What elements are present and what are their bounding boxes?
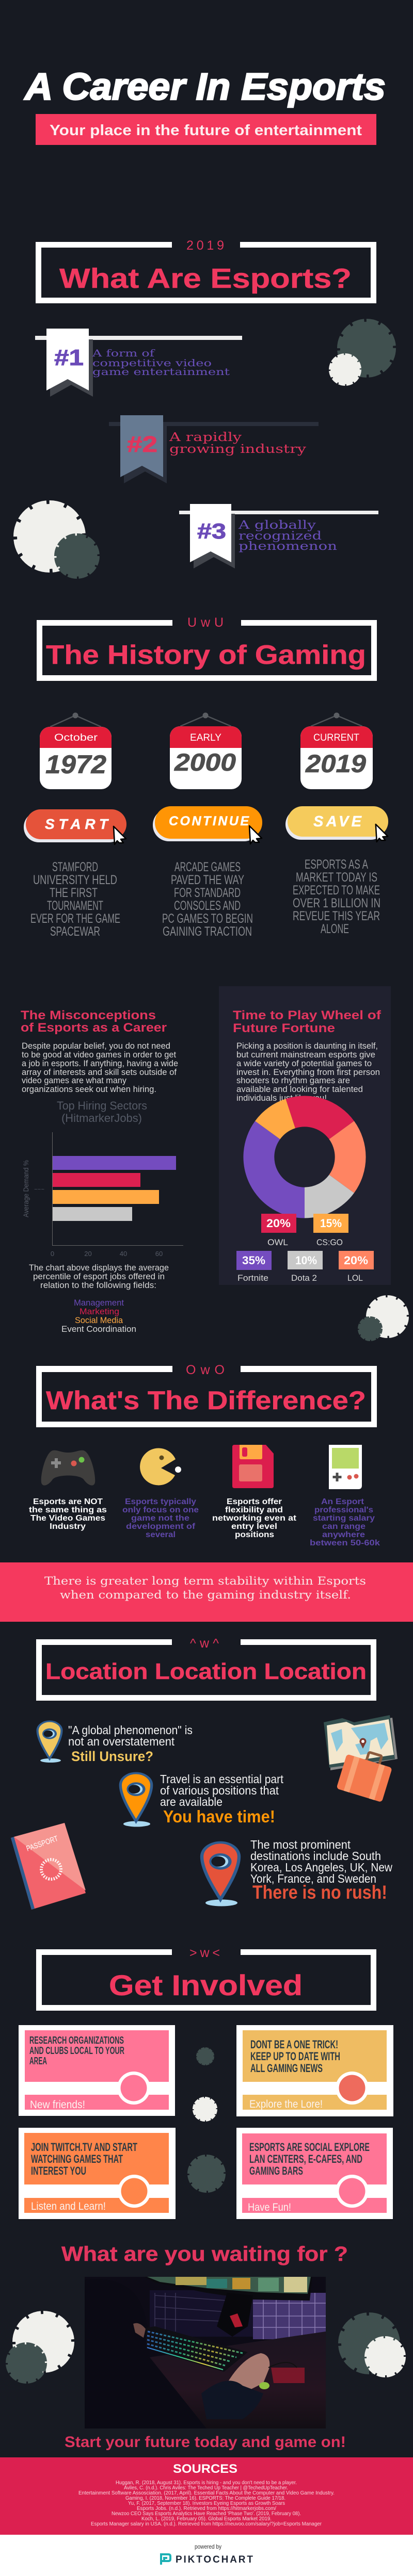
donut legend: Dota 2 bbox=[291, 1273, 317, 1283]
difference text 2: several bbox=[146, 1530, 176, 1539]
timeline text 1972: UNIVERSITY HELD bbox=[33, 873, 117, 887]
card: research organizations: AND CLUBS LOCAL TO YOUR bbox=[29, 2045, 124, 2057]
timeline text 1972: STAMFORD bbox=[52, 860, 98, 874]
difference text 3: Esports offer bbox=[227, 1497, 282, 1506]
difference text 3: positions bbox=[235, 1530, 274, 1539]
card: research organizations: RESEARCH ORGANIZATIONS bbox=[29, 2035, 124, 2046]
photo: gamer at keyboard bbox=[85, 2277, 326, 2428]
point #1: game entertainment bbox=[92, 366, 230, 378]
difference text 4: professional's bbox=[314, 1506, 373, 1514]
calendar 2019: 2019 bbox=[305, 751, 366, 778]
section heading: Location bbox=[36, 1636, 376, 1701]
gears top right bbox=[330, 320, 394, 385]
title: A Career In Esports bbox=[24, 66, 386, 108]
button: continue bbox=[153, 806, 262, 844]
calendar 2000 bbox=[170, 713, 242, 789]
difference text 4: An Esport bbox=[321, 1497, 364, 1506]
card: dont be a one trick: Explore the Lore! bbox=[249, 2098, 323, 2110]
section heading: What Are Esports bbox=[36, 238, 376, 303]
timeline text 2000: PAVED THE WAY bbox=[171, 873, 244, 887]
difference text 4: anywhere bbox=[322, 1530, 365, 1539]
timeline text 1972: SPACEWAR bbox=[50, 924, 100, 939]
point #1: A form of bbox=[92, 348, 156, 359]
location point 3: The most prominent bbox=[250, 1838, 351, 1851]
sources panel: Aviles, C. (n.d.). Chris Aviles: The Teched Up Teacher | @TechedUpTeacher. bbox=[124, 2485, 288, 2491]
icon: pacman bbox=[140, 1448, 181, 1485]
panel: misconceptions: percentile of esport jobs offered in bbox=[33, 1271, 165, 1281]
section heading: Location: ^w^ bbox=[190, 1636, 219, 1651]
callout band bbox=[0, 1562, 413, 1622]
point #3: A globally bbox=[238, 519, 316, 532]
donut legend: OWL bbox=[267, 1237, 288, 1247]
timeline text 2000 bbox=[162, 860, 253, 939]
section heading: History of Gaming: UwU bbox=[187, 615, 224, 630]
icon: passport bbox=[11, 1823, 86, 1910]
sources panel: Huggan, R. (2018, August 31). Esports is hiring - and you don't need to be a player. bbox=[116, 2480, 297, 2486]
gears between cards bbox=[188, 2048, 225, 2192]
sources panel: Esports Jobs. (n.d.). Retrieved from https://hitmarkerjobs.com/ bbox=[137, 2505, 276, 2512]
donut legend bbox=[236, 1214, 374, 1283]
panel: misconceptions: array of interests and skill sets outside of bbox=[22, 1067, 177, 1077]
button: continue: CONTINUE bbox=[169, 814, 249, 828]
donut legend: 10% bbox=[295, 1254, 317, 1267]
button: save: SAVE bbox=[313, 813, 362, 830]
sources panel: Koch, L. (2019, February 05). Global Esports Market 2019. bbox=[141, 2516, 272, 2522]
gears left bbox=[15, 502, 98, 577]
section heading: History of Gaming: The History of Gaming bbox=[46, 640, 366, 670]
closing heading: What are you waiting for ? bbox=[61, 2243, 348, 2265]
panel: wheel of future fortune: shooters to rhythm games are bbox=[236, 1075, 350, 1085]
chart legend: Event Coordination bbox=[61, 1324, 136, 1334]
card: dont be a one trick: DONT BE A ONE TRICK! bbox=[250, 2038, 338, 2051]
card: esports are social bbox=[236, 2128, 393, 2219]
section heading: What's The Difference: What's The Difference? bbox=[46, 1386, 366, 1415]
bar chart: top hiring sectors: Top Hiring Sectors bbox=[57, 1099, 147, 1112]
difference text 4: can range bbox=[322, 1522, 366, 1531]
point #3: phenomenon bbox=[239, 540, 337, 553]
timeline text 1972 bbox=[30, 860, 120, 939]
section heading: Get Involved bbox=[36, 1946, 376, 2011]
timeline text 2019: ALONE bbox=[321, 922, 349, 936]
timeline text 2019 bbox=[293, 857, 380, 936]
bar chart: top hiring sectors: 0 bbox=[51, 1250, 54, 1258]
section heading: Location: Location Location Location bbox=[45, 1659, 367, 1684]
panel: wheel of future fortune bbox=[219, 986, 391, 1285]
icon: game controller bbox=[41, 1450, 95, 1486]
difference text 3: entry level bbox=[231, 1522, 277, 1531]
icon: handheld console bbox=[329, 1445, 362, 1489]
bar chart: top hiring sectors: 60 bbox=[155, 1250, 163, 1258]
chart legend bbox=[61, 1298, 136, 1334]
bar chart: top hiring sectors: (HitmarkerJobs) bbox=[61, 1112, 142, 1124]
timeline text 2000: PC GAMES TO BEGIN bbox=[162, 911, 253, 926]
panel: wheel of future fortune: invest in. Everything from first person bbox=[236, 1067, 380, 1077]
footer: powered by piktochart bbox=[0, 2535, 413, 2576]
card: research organizations: AREA bbox=[29, 2056, 47, 2067]
card: join twitch: Listen and Learn! bbox=[31, 2200, 106, 2212]
donut legend: 35% bbox=[242, 1254, 265, 1267]
calendar 2019 bbox=[300, 713, 373, 789]
panel: misconceptions bbox=[21, 1008, 183, 1334]
location point 2: You have time! bbox=[163, 1807, 275, 1826]
location point 1: Still Unsure? bbox=[71, 1749, 153, 1764]
timeline text 2019: OVER 1 BILLION IN bbox=[293, 896, 380, 910]
location point 2 bbox=[120, 1772, 284, 1827]
point #2: #2 bbox=[127, 432, 157, 457]
difference text 1 bbox=[29, 1497, 107, 1531]
panel: wheel of future fortune: a wide variety of potential games to bbox=[236, 1058, 372, 1068]
sources panel: Newzoo CEO Says Esports Analytics Have Reached 'Phase Two'. (2019, February 08). bbox=[112, 2510, 301, 2517]
point #2: growing industry bbox=[169, 443, 306, 456]
difference text 4: between 50-60k bbox=[310, 1539, 380, 1547]
icon: floppy disk bbox=[232, 1445, 274, 1488]
icon: suitcase bbox=[336, 1746, 395, 1802]
point #3: recognized bbox=[239, 530, 322, 543]
panel: misconceptions: to be good at video games in order to get bbox=[22, 1050, 176, 1059]
difference text 2: only focus on one bbox=[122, 1506, 199, 1514]
location point 1 bbox=[38, 1721, 193, 1764]
point #3: #3 bbox=[197, 519, 226, 543]
location point 2: Travel is an essential part bbox=[160, 1772, 284, 1786]
card: join twitch: INTEREST YOU bbox=[31, 2164, 86, 2177]
timeline text 2019: MARKET TODAY IS bbox=[296, 870, 377, 885]
donut legend: Fortnite bbox=[237, 1273, 268, 1283]
timeline text 1972: EVER FOR THE GAME bbox=[30, 911, 120, 926]
donut legend: 15% bbox=[320, 1217, 342, 1230]
callout band: when compared to the gaming industry itself. bbox=[60, 1589, 351, 1601]
footer: powered by piktochart: powered by bbox=[195, 2543, 221, 2550]
location point 3 bbox=[202, 1838, 392, 1906]
panel: wheel of future fortune: available and looking for talented bbox=[236, 1084, 363, 1094]
bar chart: top hiring sectors: 20 bbox=[84, 1250, 92, 1258]
timeline text 2019: ESPORTS AS A bbox=[305, 857, 368, 872]
gears right of photo bbox=[340, 2314, 405, 2376]
location point 2: are available bbox=[160, 1795, 223, 1808]
calendar 1972 bbox=[40, 713, 112, 789]
location point 1: "A global phenomenon" is bbox=[68, 1723, 193, 1737]
panel: misconceptions: The Misconceptions bbox=[21, 1008, 156, 1022]
panel: misconceptions: Despite popular belief, you do not need bbox=[22, 1041, 170, 1051]
point #1: #1 bbox=[54, 345, 84, 370]
card: dont be a one trick bbox=[236, 2025, 393, 2116]
point #2: A rapidly bbox=[169, 431, 242, 444]
panel: wheel of future fortune: Time to Play Wheel of bbox=[233, 1008, 382, 1022]
difference text 3: networking even at bbox=[212, 1514, 297, 1523]
panel: misconceptions: video games are what many bbox=[22, 1075, 126, 1085]
card: join twitch: JOIN TWITCH.TV AND START bbox=[31, 2141, 137, 2154]
location point 1: not an overstatement bbox=[68, 1735, 175, 1748]
gears bottom right of panel bbox=[358, 1296, 408, 1341]
difference text 1: Industry bbox=[50, 1522, 86, 1531]
section heading: What's The Difference bbox=[36, 1363, 377, 1427]
section heading: What's The Difference: OwO bbox=[186, 1363, 225, 1377]
section heading: Get Involved: Get Involved bbox=[109, 1969, 303, 2001]
button: start: START bbox=[45, 816, 109, 832]
card: esports are social: GAMING BARS bbox=[249, 2164, 303, 2177]
sources panel: SOURCES bbox=[173, 2462, 237, 2476]
donut legend: CS:GO bbox=[316, 1237, 343, 1247]
difference text 3: flexibility and bbox=[225, 1506, 283, 1514]
calendar 1972: 1972 bbox=[45, 750, 106, 779]
timeline text 2000: GAINING TRACTION bbox=[163, 924, 252, 939]
calendar 2019: CURRENT bbox=[313, 732, 359, 743]
gears left of photo bbox=[7, 2313, 72, 2383]
point #1: competitive video bbox=[92, 357, 212, 369]
sources panel bbox=[0, 2457, 413, 2535]
icon: passport: PASSPORT bbox=[25, 1834, 59, 1853]
location point 3: There is no rush! bbox=[252, 1882, 387, 1903]
difference text 1: The Video Games bbox=[30, 1514, 105, 1523]
bar chart: top hiring sectors: Average Demand % bbox=[22, 1160, 30, 1217]
panel: misconceptions: a job in esports. If anything, having a wide bbox=[22, 1058, 178, 1068]
difference text 1: the same thing as bbox=[29, 1506, 107, 1514]
section heading: Get Involved: >w< bbox=[189, 1946, 220, 1960]
calendar 1972: October bbox=[54, 732, 98, 743]
callout band: There is greater long term stability within Esports bbox=[44, 1575, 366, 1587]
timeline text 1972: THE FIRST bbox=[50, 886, 98, 900]
location point 3: York, France, and Sweden bbox=[250, 1872, 376, 1885]
difference text 1: Esports are NOT bbox=[33, 1497, 103, 1506]
sources panel: Entertainment Software Assosciation. (2017, April). Essential Facts About the Computer and Video Game Industry. bbox=[78, 2490, 335, 2496]
location point 3: destinations include South bbox=[250, 1849, 381, 1863]
chart legend: Management bbox=[74, 1298, 124, 1308]
section heading: What Are Esports: What Are Esports? bbox=[59, 263, 352, 294]
sources panel: Yu, F. (2017, September 18). Investors Eyeing Esports as Growth Soars bbox=[128, 2500, 285, 2506]
card: join twitch bbox=[19, 2128, 176, 2219]
difference text 4 bbox=[310, 1497, 380, 1547]
panel: misconceptions: relation to the following fields: bbox=[40, 1280, 156, 1290]
subtitle banner bbox=[36, 114, 376, 145]
panel: wheel of future fortune: individuals just like you! bbox=[236, 1093, 327, 1103]
card: dont be a one trick: KEEP UP TO DATE WITH bbox=[250, 2050, 340, 2063]
location point 2: of various positions that bbox=[160, 1784, 279, 1797]
button: start bbox=[24, 809, 126, 844]
panel: misconceptions: organizations seek out when hiring. bbox=[22, 1084, 156, 1094]
donut legend: LOL bbox=[347, 1273, 363, 1283]
point #2 bbox=[109, 415, 319, 483]
point #3 bbox=[179, 504, 378, 568]
sources panel: Esports Manager salary in USA. (n.d.). Retrieved from https://neuvoo.com/salary/?job=Esports Manager bbox=[91, 2521, 322, 2527]
calendar 2000: EARLY bbox=[190, 732, 221, 743]
donut chart bbox=[243, 1096, 366, 1218]
bar chart: top hiring sectors: 40 bbox=[120, 1250, 127, 1258]
card: esports are social: Have Fun! bbox=[248, 2202, 291, 2213]
donut legend: 20% bbox=[344, 1254, 368, 1267]
donut legend: 20% bbox=[266, 1217, 291, 1230]
card: dont be a one trick: ALL GAMING NEWS bbox=[250, 2062, 323, 2075]
card: esports are social: LAN CENTERS, E-CAFES, AND bbox=[249, 2153, 362, 2165]
bar chart: top hiring sectors bbox=[22, 1099, 183, 1258]
point #1 bbox=[35, 329, 242, 397]
difference text 4: starting salary bbox=[313, 1514, 375, 1523]
difference text 2: game not the bbox=[131, 1514, 189, 1523]
footer: powered by piktochart: PIKTOCHART bbox=[176, 2554, 253, 2565]
location point 3: Korea, Los Angeles, UK, New bbox=[250, 1861, 392, 1874]
panel: misconceptions: of Esports as a Career bbox=[21, 1021, 167, 1035]
difference text 3 bbox=[212, 1497, 297, 1539]
timeline text 2000: ARCADE GAMES bbox=[174, 860, 241, 874]
icon: map bbox=[324, 1715, 398, 1770]
timeline text 1972: TOURNAMENT bbox=[47, 899, 103, 913]
chart legend: Social Media bbox=[75, 1315, 123, 1325]
subtitle banner: Your place in the future of entertainment bbox=[50, 122, 362, 139]
difference text 2: Esports typically bbox=[125, 1497, 196, 1506]
timeline text 2000: FOR STANDARD bbox=[174, 886, 241, 900]
card: join twitch: WATCHING GAMES THAT bbox=[31, 2153, 123, 2165]
timeline text 2000: CONSOLES AND bbox=[174, 899, 241, 913]
section heading: History of Gaming bbox=[37, 615, 377, 681]
calendar 2000: 2000 bbox=[174, 748, 236, 776]
difference text 2: development of bbox=[126, 1522, 196, 1531]
chart legend: Marketing bbox=[80, 1307, 119, 1316]
section heading: What Are Esports: 2019 bbox=[186, 238, 224, 253]
panel: wheel of future fortune: but current mainstream esports give bbox=[236, 1050, 375, 1059]
button: save bbox=[285, 806, 388, 842]
call to action: Start your future today and game on! bbox=[65, 2434, 346, 2451]
card: research organizations: New friends! bbox=[30, 2099, 85, 2111]
card: research organizations bbox=[19, 2025, 175, 2116]
panel: wheel of future fortune: Future Fortune bbox=[233, 1021, 335, 1035]
difference text 2 bbox=[122, 1497, 199, 1539]
bar chart: top hiring sectors: ~~~ bbox=[34, 1187, 44, 1193]
panel: misconceptions: The chart above displays the average bbox=[29, 1263, 169, 1273]
panel: wheel of future fortune: Picking a position is daunting in itself, bbox=[236, 1041, 378, 1051]
sources panel: Gaming, I. (2018, November 16). ESPORTS: The Complete Guide 17/18. bbox=[125, 2495, 285, 2501]
